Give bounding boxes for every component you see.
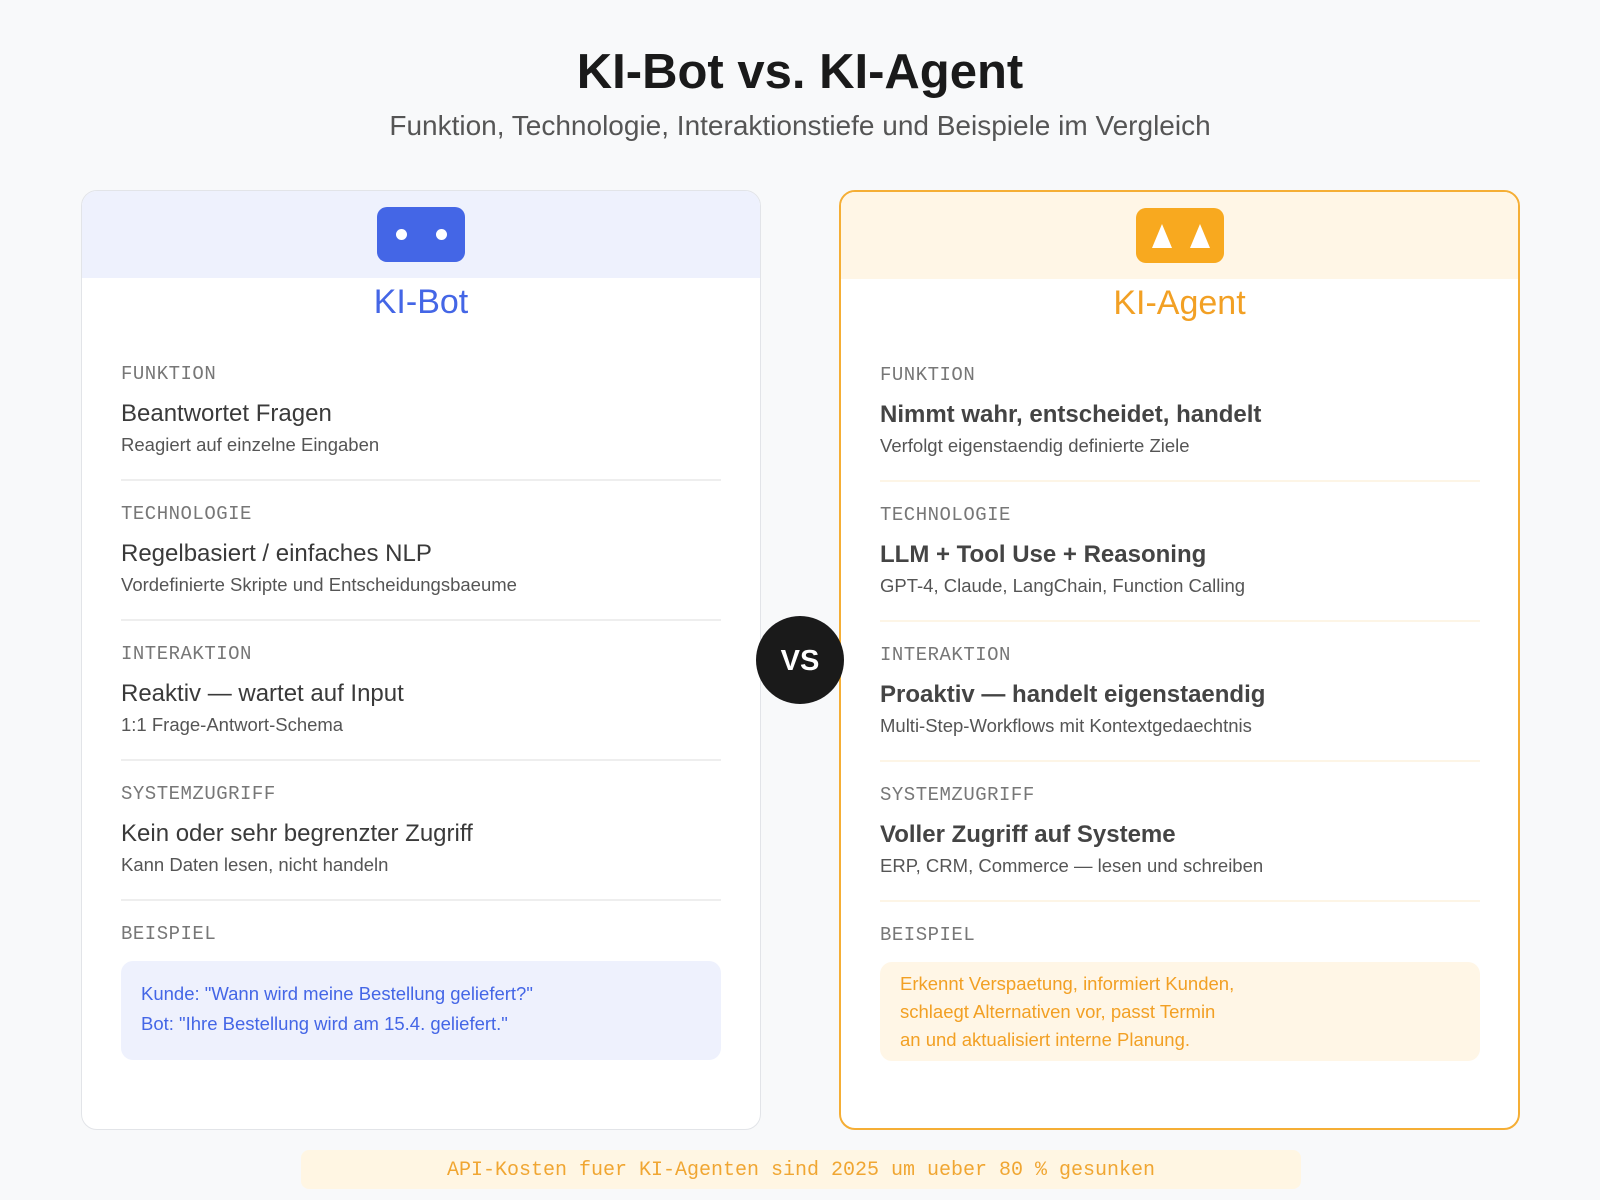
section: Technologie: TECHNOLOGIE (121, 503, 252, 525)
heading: KI-Bot: KI-Bot (374, 283, 468, 321)
section label: Beispiel: BEISPIEL (880, 924, 975, 946)
section: Technologie: TECHNOLOGIE (880, 504, 1011, 526)
section: Interaktion: Proaktiv — handelt eigenstaendig (880, 681, 1265, 708)
VS badge: VS (781, 645, 819, 677)
panel: KI-Bot (81, 190, 761, 1130)
example box (880, 962, 1480, 1061)
section: Funktion (880, 364, 1480, 482)
header band (841, 192, 1518, 279)
example box: Erkennt Verspaetung, informiert Kunden, (900, 973, 1234, 994)
example box: schlaegt Alternativen vor, passt Termin (900, 1001, 1215, 1022)
header band (82, 191, 760, 278)
section: Systemzugriff: Kein oder sehr begrenzter Zugriff (121, 820, 473, 847)
section: Funktion: Beantwortet Fragen (121, 400, 332, 427)
section: Technologie (121, 503, 721, 621)
section: Technologie: GPT-4, Claude, LangChain, Function Calling (880, 575, 1245, 596)
section: Systemzugriff (121, 783, 721, 901)
section: Technologie: LLM + Tool Use + Reasoning (880, 541, 1206, 568)
section: Systemzugriff: Kann Daten lesen, nicht handeln (121, 854, 388, 875)
section: Funktion: Verfolgt eigenstaendig definierte Ziele (880, 435, 1190, 456)
panel: KI-Agent (839, 190, 1520, 1130)
section: Technologie (880, 504, 1480, 622)
section: Funktion (121, 363, 721, 481)
section: Interaktion: Multi-Step-Workflows mit Kontextgedaechtnis (880, 715, 1252, 736)
section: Funktion: Reagiert auf einzelne Eingaben (121, 434, 379, 455)
footer banner (301, 1150, 1301, 1189)
section: Interaktion: Reaktiv — wartet auf Input (121, 680, 404, 707)
section label: Beispiel: BEISPIEL (121, 923, 216, 945)
section: Funktion: FUNKTION (880, 364, 975, 386)
example box (121, 961, 721, 1060)
example box: an und aktualisiert interne Planung. (900, 1029, 1190, 1050)
section: Interaktion (121, 643, 721, 761)
example box: Kunde: "Wann wird meine Bestellung geliefert?" (141, 983, 533, 1004)
subtitle: Funktion, Technologie, Interaktionstiefe und Beispiele im Vergleich (389, 110, 1211, 141)
section: Interaktion: INTERAKTION (880, 644, 1011, 666)
section: Interaktion (880, 644, 1480, 762)
example box: Bot: "Ihre Bestellung wird am 15.4. geliefert." (141, 1012, 508, 1034)
section: Systemzugriff: SYSTEMZUGRIFF (121, 783, 276, 805)
section: Systemzugriff: ERP, CRM, Commerce — lesen und schreiben (880, 855, 1263, 876)
section: Interaktion: INTERAKTION (121, 643, 252, 665)
footer banner: API-Kosten fuer KI-Agenten sind 2025 um ueber 80 % gesunken (447, 1159, 1155, 1182)
icon: agent (1136, 208, 1224, 263)
section: Technologie: Regelbasiert / einfaches NLP (121, 540, 432, 567)
section: Interaktion: 1:1 Frage-Antwort-Schema (121, 714, 343, 735)
section: Systemzugriff: SYSTEMZUGRIFF (880, 784, 1035, 806)
section: Systemzugriff (880, 784, 1480, 902)
heading: KI-Agent: KI-Agent (1113, 284, 1246, 322)
section: Technologie: Vordefinierte Skripte und Entscheidungsbaeume (121, 574, 517, 595)
VS badge (756, 616, 844, 704)
title: KI-Bot vs. KI-Agent (577, 45, 1023, 99)
section: Systemzugriff: Voller Zugriff auf Systeme (880, 821, 1176, 848)
section: Funktion: Nimmt wahr, entscheidet, handelt (880, 401, 1261, 428)
section: Funktion: FUNKTION (121, 363, 216, 385)
icon: bot (377, 207, 465, 262)
